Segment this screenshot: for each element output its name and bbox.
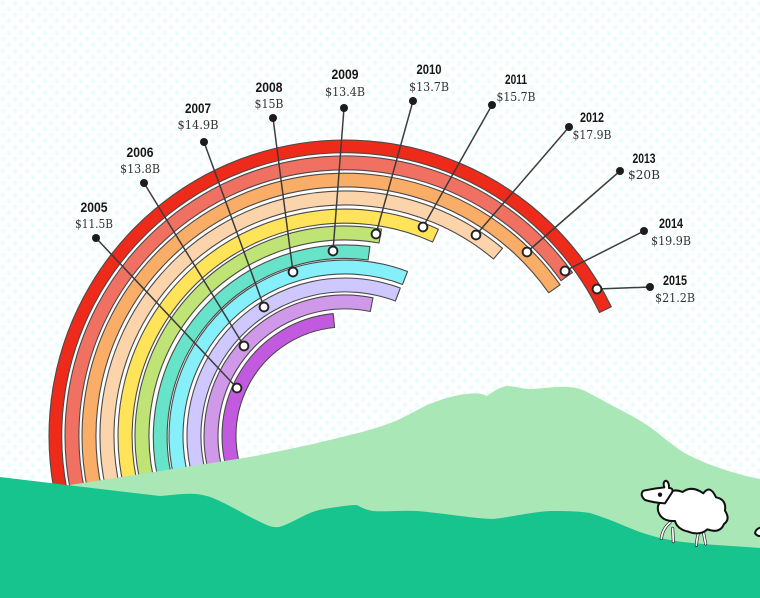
band 2014 [65,156,572,490]
band 2005 [222,314,335,490]
label 2013 [523,150,660,256]
label 2009: $13.4B [325,85,365,99]
band 2012 [100,191,503,490]
band 2011 [118,209,438,490]
label 2011: 2011 [505,71,527,87]
label 2014: $19.9B [651,234,691,248]
band 2010 [135,226,382,490]
label 2012: 2012 [580,109,604,125]
label 2010: $13.7B [409,80,449,94]
label 2006: 2006 [126,144,154,160]
label 2006 [120,144,248,350]
sheep legs [661,522,706,545]
white gaps between rainbow bands [65,156,572,490]
band 2007 [187,278,400,490]
label 2005: 2005 [80,199,108,215]
label 2013: 2013 [632,150,656,166]
rainbow arcs [49,140,611,490]
label 2012 [472,109,612,239]
label 2011 [419,71,536,231]
label 2008: $15B [254,97,284,111]
band 2015 [49,140,611,490]
label 2005 [75,199,241,392]
label 2015: 2015 [663,272,687,288]
label 2009 [325,66,365,255]
label 2008: 2008 [256,79,283,95]
sheep eye [658,492,662,497]
label 2014 [561,215,691,275]
label 2008 [254,79,297,276]
sheep body [658,489,728,533]
front hill [0,477,760,598]
back hill [70,386,760,598]
label 2009: 2009 [332,66,359,82]
label 2007 [178,100,268,311]
sheep head [642,481,673,503]
sheep [642,481,728,545]
label 2010: 2010 [416,61,442,77]
label 2015 [593,272,695,305]
label 2011: $15.7B [496,90,536,104]
label 2005: $11.5B [75,217,113,231]
band 2008 [169,260,408,490]
band 2013 [82,173,560,490]
leader lines [96,101,650,388]
label 2012: $17.9B [572,128,612,142]
band 2009 [153,245,370,490]
label 2013: $20B [628,168,660,182]
label 2006: $13.8B [120,162,160,176]
label 2007: $14.9B [178,118,219,132]
label 2015: $21.2B [655,291,695,305]
label 2010 [372,61,449,238]
band 2006 [204,295,373,490]
label 2007: 2007 [185,100,211,116]
second sheep fragment [755,527,760,536]
label 2014: 2014 [659,215,683,231]
